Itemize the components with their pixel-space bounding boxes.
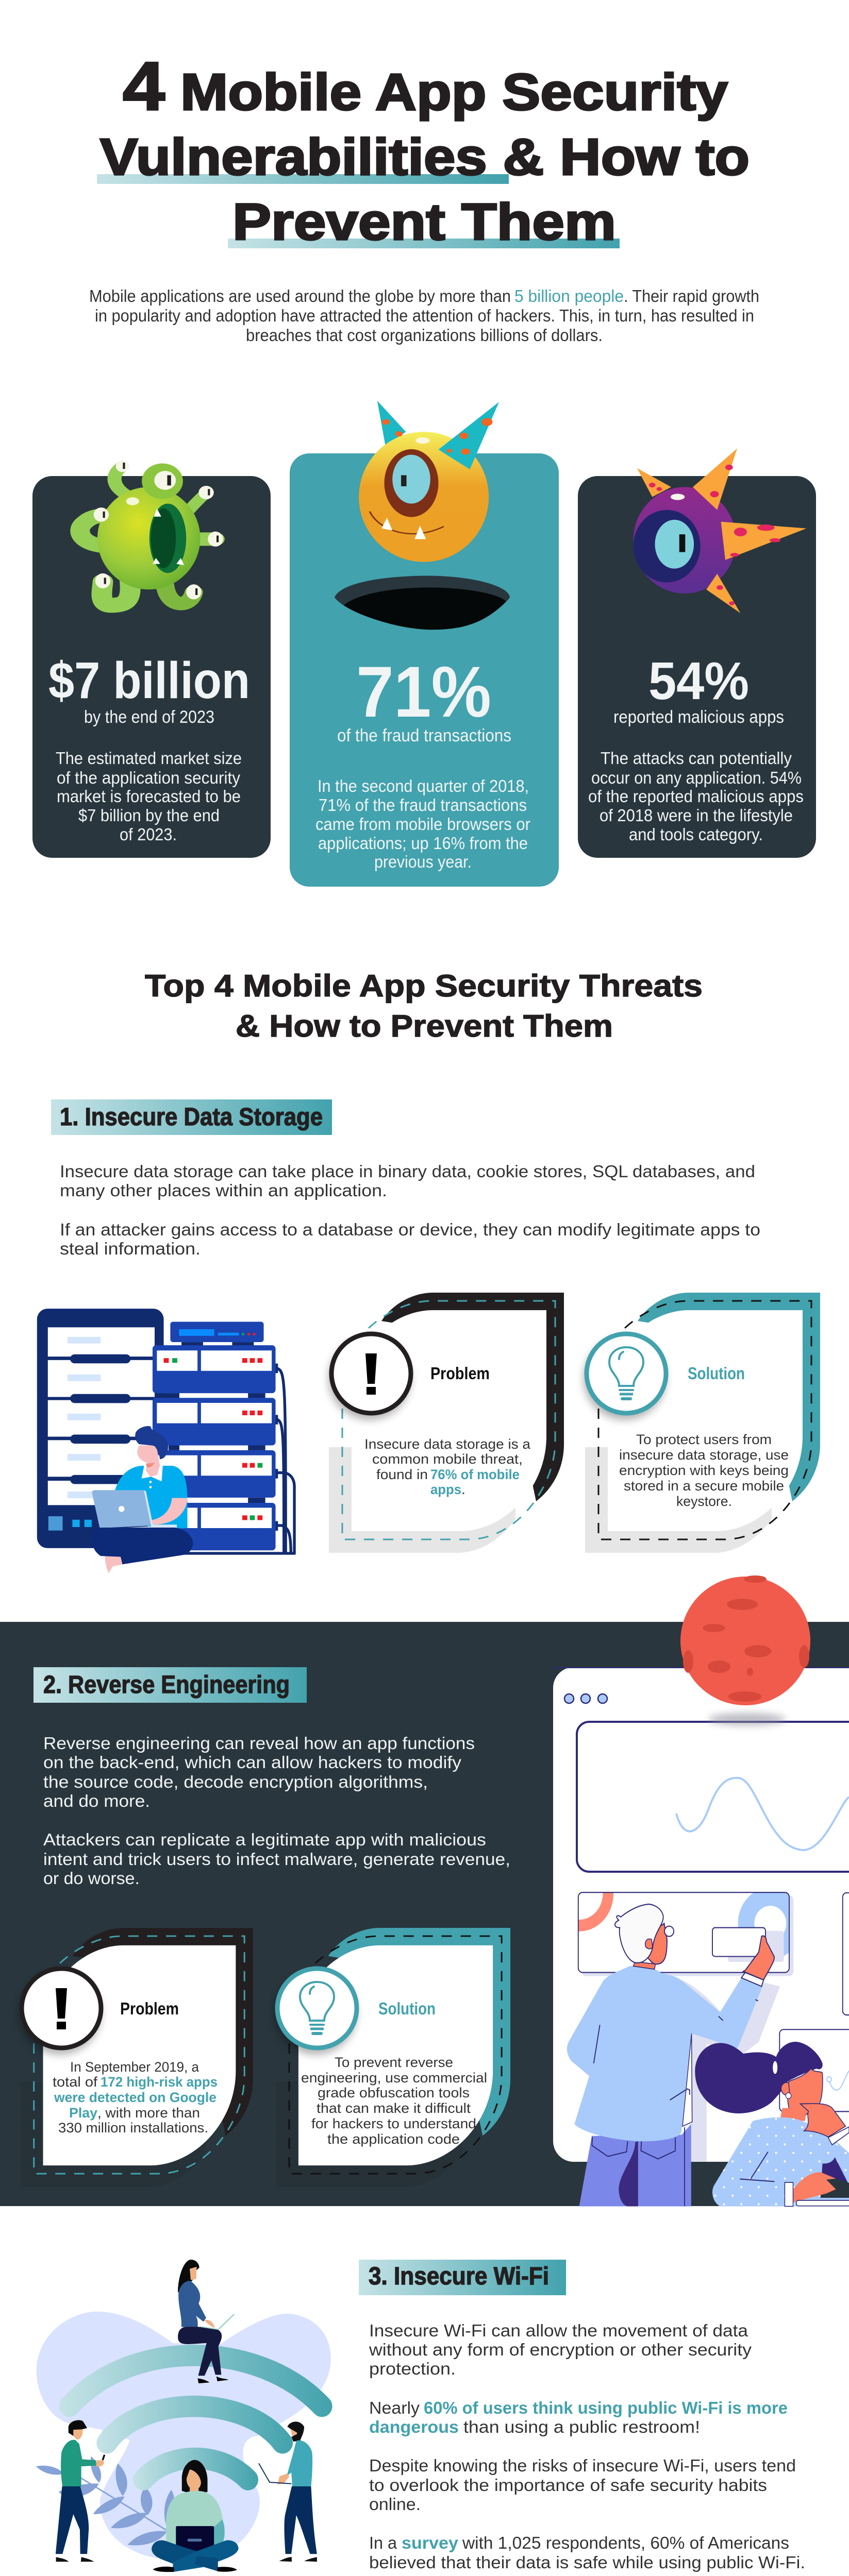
stat description: and tools category. (629, 825, 763, 844)
icon: yellow monster (359, 401, 499, 562)
stat description: of the application security (57, 768, 240, 787)
intro text (89, 286, 759, 345)
label: problem: Problem (430, 1364, 490, 1383)
section text: than using a public restroom! (463, 2417, 700, 2436)
title: Prevent Them (232, 193, 616, 251)
card: solution (274, 1928, 510, 2187)
stat description: previous year. (374, 852, 472, 871)
intro text: Mobile applications are used around the globe by more than (89, 286, 511, 306)
problem text: apps (430, 1482, 461, 1497)
stat value: 71% (356, 651, 491, 732)
stat caption: by the end of 2023 (84, 707, 214, 727)
stat description: The estimated market size (56, 749, 242, 768)
solution text: insecure data storage, use (619, 1447, 789, 1463)
illustration: wi-fi symbol with people (36, 2260, 331, 2572)
title: Vulnerabilities & How to (100, 128, 750, 186)
section text: and do more. (43, 1791, 150, 1810)
problem text: In September 2019, a (70, 2059, 199, 2075)
solution text: the application code (327, 2131, 460, 2147)
icon: exclamation (19, 1969, 101, 2055)
stat caption: of the fraud transactions (337, 726, 511, 745)
heading: top 4 threats (145, 969, 703, 1043)
problem text: 330 million installations. (58, 2120, 208, 2136)
icon: light bulb (274, 1969, 357, 2055)
heading: top 4 threats: Top 4 Mobile App Security Threats (145, 969, 703, 1003)
section text: believed that their data is safe while using public Wi-Fi. (369, 2553, 805, 2572)
problem text: found in (376, 1467, 428, 1482)
solution text: To protect users from (636, 1432, 772, 1447)
section 2: reverse engineering (0, 1575, 849, 2206)
icon: light bulb (584, 1334, 666, 1420)
section text: dangerous (369, 2417, 459, 2436)
problem text (364, 1436, 531, 1497)
label: solution: Solution (688, 1364, 745, 1383)
section text: to overlook the importance of safe security habits (369, 2476, 767, 2495)
heading: top 4 threats: & How to Prevent Them (236, 1009, 613, 1043)
card: problem (328, 1293, 564, 1553)
problem text: were detected on Google (54, 2090, 217, 2105)
intro text: in popularity and adoption have attracted the attention of hackers. This, in turn, has resulted in (95, 306, 754, 325)
card: problem (19, 1928, 253, 2187)
section text: many other places within an application. (60, 1181, 387, 1200)
stat value: 54% (648, 651, 749, 710)
stat description (56, 749, 242, 844)
illustration: red planet (680, 1575, 810, 1725)
intro text: breaches that cost organizations billions of dollars. (246, 326, 603, 345)
section text (43, 1734, 510, 1888)
section label: 1. Insecure Data Storage (60, 1104, 323, 1131)
section text: on the back-end, which can allow hackers to modify (43, 1753, 462, 1772)
stat caption: reported malicious apps (613, 707, 784, 727)
problem text: , with more than (97, 2105, 200, 2121)
problem text: Play (69, 2105, 97, 2121)
stat description: occur on any application. 54% (591, 768, 802, 787)
section text: with 1,025 respondents, 60% of Americans (462, 2533, 789, 2552)
title: Mobile App Security (180, 63, 728, 121)
stat description: of the reported malicious apps (588, 787, 804, 806)
solution text (301, 2055, 487, 2147)
solution text: engineering, use commercial (301, 2070, 487, 2086)
solution text (619, 1432, 789, 1509)
section text: Attackers can replicate a legitimate app with malicious (43, 1830, 486, 1849)
solution text: for hackers to understand (311, 2116, 476, 2131)
icon: purple monster (633, 448, 806, 613)
stat description: came from mobile browsers or (315, 815, 530, 834)
section text: If an attacker gains access to a database or device, they can modify legitimate apps to (60, 1220, 760, 1239)
stat description: applications; up 16% from the (318, 834, 528, 853)
section label: 3. Insecure Wi-Fi (369, 2263, 549, 2290)
label: solution: Solution (378, 1999, 436, 2018)
section text: In a (369, 2533, 397, 2552)
solution text: grade obfuscation tools (318, 2085, 470, 2100)
section text: 60% of users think using public Wi-Fi is more (424, 2398, 788, 2417)
section text: Insecure data storage can take place in binary data, cookie stores, SQL databases, and (60, 1162, 755, 1181)
panel: stat 71% (290, 401, 559, 887)
illustration: browser window with people (550, 1667, 849, 2206)
label: problem: Problem (120, 1999, 179, 2018)
section text (369, 2321, 805, 2572)
problem text: total of (53, 2074, 98, 2090)
problem text: 172 high-risk apps (101, 2074, 218, 2090)
solution text: stored in a secure mobile (624, 1478, 784, 1494)
title: 4 (123, 48, 165, 125)
stat description: $7 billion by the end (78, 806, 220, 825)
section text: Despite knowing the risks of insecure Wi-Fi, users tend (369, 2456, 796, 2475)
intro text: . Their rapid growth (624, 286, 759, 306)
problem text: 76% of mobile (430, 1467, 520, 1482)
icon: hole (335, 575, 510, 630)
panel: stat 54% (578, 448, 816, 858)
problem text (53, 2059, 218, 2136)
section text: without any form of encryption or other security (369, 2340, 752, 2359)
title (97, 48, 750, 251)
solution text: that can make it difficult (317, 2100, 471, 2116)
section background (0, 1622, 849, 2206)
section text: online. (369, 2495, 421, 2514)
section 3: insecure wi-fi (36, 2260, 805, 2576)
section text (60, 1162, 760, 1258)
intro text: 5 billion people (514, 286, 624, 306)
card: solution (584, 1293, 820, 1553)
icon: green monster (80, 460, 223, 605)
section text: Reverse engineering can reveal how an app functions (43, 1734, 475, 1753)
section label: 2. Reverse Engineering (43, 1671, 290, 1699)
stat description: 71% of the fraud transactions (319, 795, 527, 815)
problem text: . (461, 1482, 465, 1497)
section text: intent and trick users to infect malware, generate revenue, (43, 1850, 510, 1869)
icon: exclamation (328, 1334, 411, 1420)
section text: protection. (369, 2359, 456, 2378)
problem text: common mobile threat, (372, 1451, 523, 1467)
stat description: of 2023. (120, 825, 177, 844)
stat description (588, 749, 804, 844)
stat description: market is forecasted to be (57, 787, 241, 806)
solution text: To prevent reverse (335, 2055, 453, 2070)
stat description: of 2018 were in the lifestyle (600, 806, 793, 825)
section text: survey (402, 2533, 459, 2552)
stat value: $7 billion (48, 652, 250, 709)
illustration: server rack with person (37, 1309, 295, 1573)
solution text: keystore. (676, 1494, 732, 1509)
section text: the source code, decode encryption algorithms, (43, 1772, 428, 1791)
panel: stat $7 billion (32, 460, 271, 858)
section text: or do worse. (43, 1869, 140, 1888)
section text: steal information. (60, 1239, 201, 1258)
stat description: The attacks can potentially (601, 749, 792, 768)
solution text: encryption with keys being (619, 1463, 789, 1478)
section 1: insecure data storage (37, 1099, 820, 1573)
stat description: In the second quarter of 2018, (318, 776, 529, 795)
section text: Insecure Wi-Fi can allow the movement of data (369, 2321, 748, 2340)
stat description (315, 776, 530, 871)
section text: Nearly (369, 2398, 420, 2417)
problem text: Insecure data storage is a (364, 1436, 531, 1452)
